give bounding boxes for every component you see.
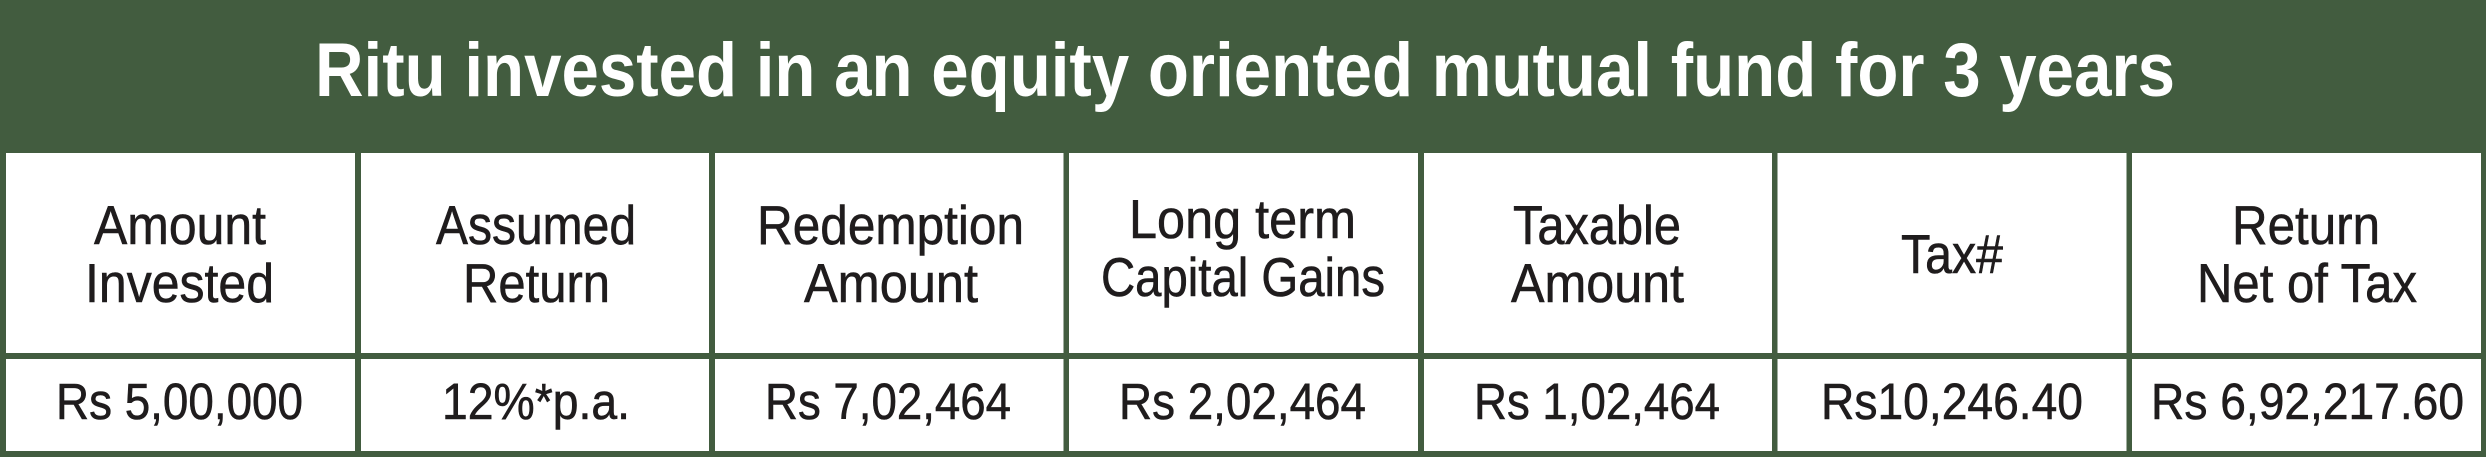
column: Assumed Return [361, 153, 709, 451]
header: Return Net of Tax [2197, 194, 2417, 314]
column: Redemption Amount [715, 153, 1064, 451]
header: Assumed Return [436, 194, 636, 314]
header: Amount Invested [85, 194, 274, 314]
value: Rs 1,02,464: Rs 1,02,464 [1474, 373, 1720, 430]
header: Long term Capital Gains: Capital Gains [1101, 246, 1385, 308]
value: Rs 5,00,000: Rs 5,00,000 [56, 373, 303, 430]
value: Rs 7,02,464: Rs 7,02,464 [765, 373, 1011, 430]
header: Redemption Amount: Amount [804, 252, 978, 314]
header: Taxable Amount: Amount [1511, 252, 1684, 314]
header: Amount Invested: Amount [94, 194, 266, 256]
column: Amount Invested [6, 153, 355, 451]
header: Assumed Return: Return [463, 252, 610, 314]
header: Long term Capital Gains: Long term [1129, 188, 1356, 250]
header: Amount Invested: Invested [85, 252, 274, 314]
column: Return Net of Tax [2132, 153, 2481, 451]
header: Return Net of Tax: Net of Tax [2197, 252, 2417, 314]
value: 12%*p.a.: 12%*p.a. [442, 373, 630, 430]
header: Tax#: Tax# [1901, 223, 2003, 285]
column: Tax# [1778, 153, 2126, 451]
header: Taxable Amount [1511, 194, 1684, 314]
header: Redemption Amount: Redemption [757, 194, 1024, 256]
header: Redemption Amount [757, 194, 1024, 314]
value: Rs 2,02,464: Rs 2,02,464 [1119, 373, 1366, 430]
column: Long term Capital Gains [1069, 153, 1418, 451]
title: Ritu invested in an equity oriented mutual fund for 3 years [315, 28, 2175, 113]
column: Taxable Amount [1424, 153, 1772, 451]
header: Assumed Return: Assumed [436, 194, 636, 256]
value: Rs10,246.40: Rs10,246.40 [1821, 373, 2083, 430]
header: Long term Capital Gains [1101, 188, 1385, 308]
header: Return Net of Tax: Return [2232, 194, 2380, 256]
header: Taxable Amount: Taxable [1513, 194, 1681, 256]
